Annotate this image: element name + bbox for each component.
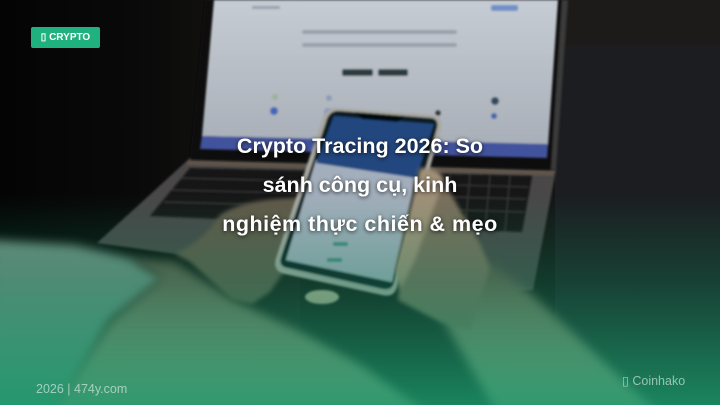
laptop keyboard xyxy=(150,168,532,232)
title: sánh công cụ, kinh xyxy=(263,173,457,197)
screen icons xyxy=(270,94,499,119)
laptop lid xyxy=(190,0,568,170)
laptop deck xyxy=(97,158,556,292)
title xyxy=(221,134,498,238)
phone screen upper blue xyxy=(316,116,434,178)
footer date and site: 2026 | 474y.com xyxy=(36,382,127,396)
phone screen lower part xyxy=(286,160,416,282)
background: left dark area xyxy=(0,0,300,405)
phone notch xyxy=(355,112,405,122)
right forearm xyxy=(443,262,660,405)
sleeve xyxy=(0,240,165,405)
category badge: ▯ CRYPTO xyxy=(41,32,90,43)
phone body xyxy=(275,108,441,296)
phone xyxy=(275,108,441,296)
background: right wall xyxy=(555,0,720,405)
right hand xyxy=(398,170,490,330)
right fingers xyxy=(395,168,444,290)
left forearm xyxy=(50,258,430,405)
title: nghiệm thực chiến & mẹo xyxy=(222,212,498,236)
left hand xyxy=(175,198,300,304)
screen taskbar xyxy=(200,136,548,158)
thumb xyxy=(305,290,339,304)
screen button top right xyxy=(491,5,518,11)
laptop screen xyxy=(200,0,558,158)
source label: ▯ Coinhako xyxy=(622,374,685,388)
screen store buttons xyxy=(342,69,408,76)
title: Crypto Tracing 2026: So xyxy=(237,134,483,158)
phone list items xyxy=(327,242,348,262)
category badge xyxy=(31,27,100,48)
screen headline lines xyxy=(252,6,457,47)
